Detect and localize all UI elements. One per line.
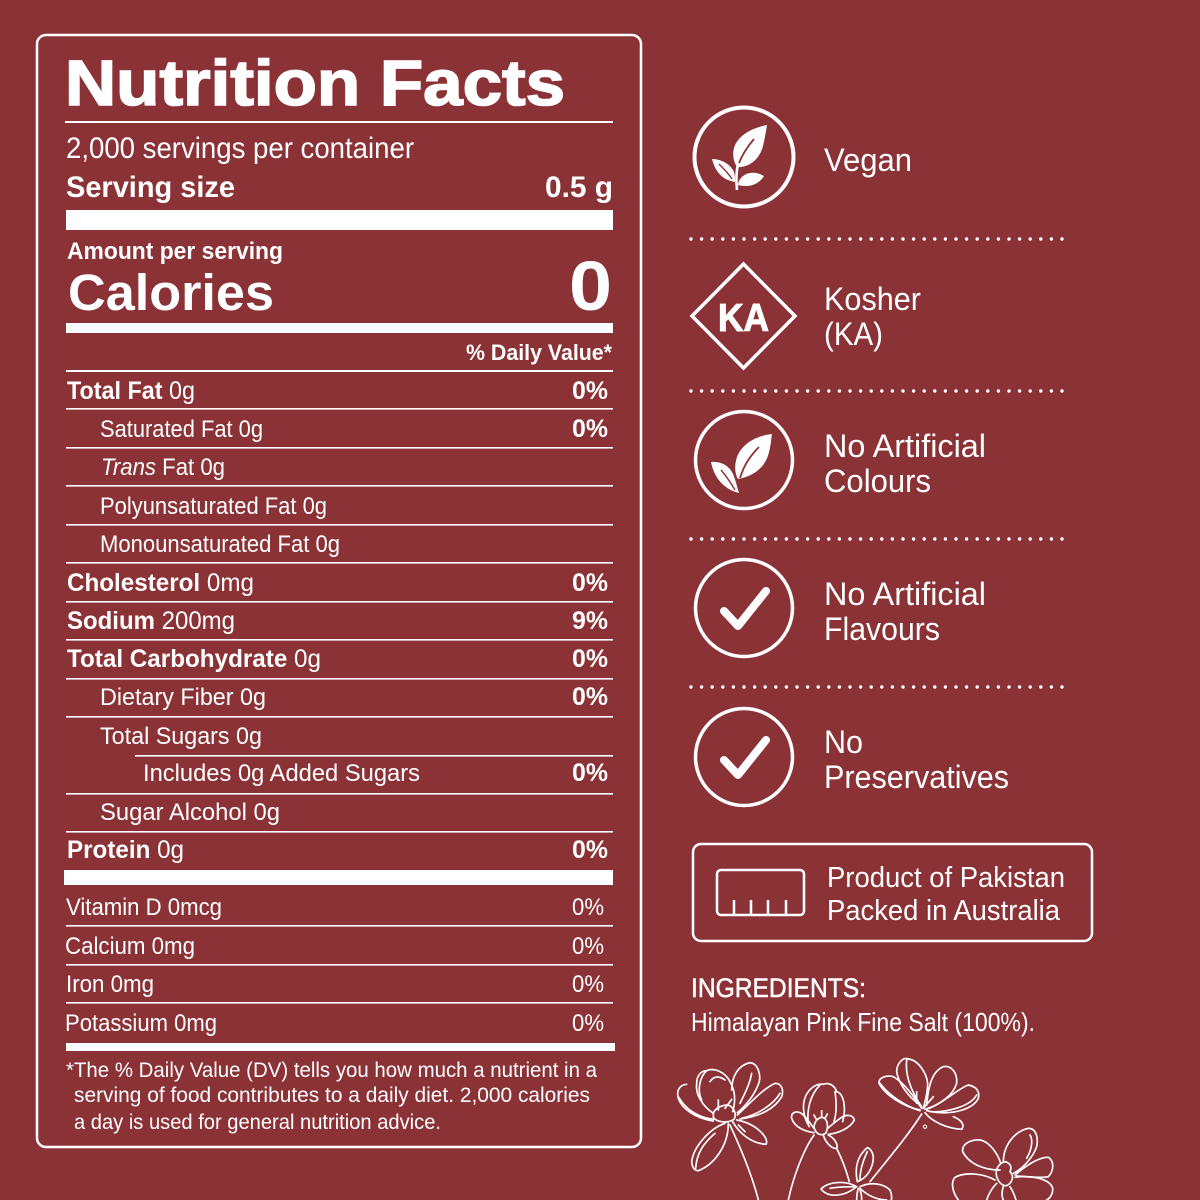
icon: kosher diamond xyxy=(692,264,795,368)
nutrient rows: Cholesterol 0mg xyxy=(67,569,254,597)
calories xyxy=(68,247,612,325)
panel: nutrition facts xyxy=(37,35,641,1147)
nutrient rows: Protein 0g xyxy=(67,836,184,864)
nutrient rows: 0% xyxy=(572,971,604,998)
nutrient rows: 0% xyxy=(572,415,608,443)
title: Nutrition Facts xyxy=(65,47,565,119)
nutrient rows: 0% xyxy=(572,683,608,711)
nutrient rows: 0% xyxy=(572,645,608,673)
serving size: 0.5 g xyxy=(545,171,613,204)
label: vegan: Vegan xyxy=(824,142,912,178)
ingredients xyxy=(691,973,1035,1037)
nutrient rows: Polyunsaturated Fat 0g xyxy=(100,493,327,520)
nutrient rows: Calcium 0mg xyxy=(65,933,195,960)
icon: no artificial colours leaf xyxy=(696,412,792,508)
label: kosher xyxy=(824,281,921,352)
footnote: serving of food contributes to a daily diet. 2,000 calories xyxy=(74,1084,590,1107)
divider: dotted 1 xyxy=(691,237,1063,241)
serving size xyxy=(66,171,613,204)
nutrient rows: 0% xyxy=(572,1010,604,1037)
nutrient rows: 9% xyxy=(572,607,608,635)
calories: 0 xyxy=(569,247,612,325)
nutrient rows: Saturated Fat 0g xyxy=(100,416,263,443)
icon: check no preservatives xyxy=(696,708,792,806)
icon: vegan plant xyxy=(694,108,794,206)
nutrient rows: Total Carbohydrate 0g xyxy=(67,645,321,673)
label: no artificial colours xyxy=(824,428,986,499)
label: no artificial flavours: Flavours xyxy=(824,611,940,647)
label: no preservatives xyxy=(824,724,1009,795)
nutrient rows: 0% xyxy=(572,377,608,405)
servings per container: 2,000 servings per container xyxy=(66,132,414,165)
label: no artificial flavours: No Artificial xyxy=(824,576,986,612)
label: no artificial colours: Colours xyxy=(824,463,931,499)
flower 4 xyxy=(821,1148,892,1200)
nutrient rows: Dietary Fiber 0g xyxy=(100,684,266,711)
label: no artificial colours: No Artificial xyxy=(824,428,986,464)
icon: ruler xyxy=(717,870,804,915)
label: no artificial flavours xyxy=(824,576,986,647)
nutrient rows: Includes 0g Added Sugars xyxy=(143,760,420,787)
panel: origin xyxy=(693,844,1092,941)
flower 5 xyxy=(953,1128,1053,1200)
nutrient rows: Vitamin D 0mcg xyxy=(66,894,222,921)
label: kosher: Kosher xyxy=(824,281,921,317)
nutrient rows: Sugar Alcohol 0g xyxy=(100,799,280,826)
divider: dotted 3 xyxy=(691,537,1063,541)
calories: Calories xyxy=(68,264,274,321)
ingredients: Himalayan Pink Fine Salt (100%). xyxy=(691,1007,1035,1037)
nutrient rows: 0% xyxy=(572,759,608,787)
divider: dotted 2 xyxy=(691,389,1063,393)
nutrient rows: 0% xyxy=(572,894,604,921)
footnote: *The % Daily Value (DV) tells you how much a nutrient in a xyxy=(66,1059,597,1082)
flower 2 xyxy=(788,1084,854,1200)
nutrient rows xyxy=(64,121,615,1051)
nutrient rows: Total Fat 0g xyxy=(67,377,195,405)
illustration: flowers xyxy=(678,1059,1053,1200)
nutrient rows: Total Sugars 0g xyxy=(100,723,262,750)
flower 3 xyxy=(870,1059,979,1182)
nutrient rows: Monounsaturated Fat 0g xyxy=(100,531,340,558)
serving size: Serving size xyxy=(66,171,235,204)
icon: check artificial flavours xyxy=(696,560,792,656)
origin text xyxy=(827,862,1065,927)
nutrient rows: Potassium 0mg xyxy=(65,1010,217,1037)
label: kosher: (KA) xyxy=(824,316,883,352)
amount per serving: Amount per serving xyxy=(67,238,283,265)
origin text: Packed in Australia xyxy=(827,895,1061,927)
label: no preservatives: No xyxy=(824,724,863,760)
nutrient rows: 0% xyxy=(572,569,608,597)
nutrient rows: Iron 0mg xyxy=(66,971,154,998)
nutrient rows: 0% xyxy=(572,836,608,864)
icon: kosher diamond: KA xyxy=(718,297,769,340)
ingredients: INGREDIENTS: xyxy=(691,973,866,1003)
footnote: a day is used for general nutrition advice. xyxy=(74,1111,441,1134)
nutrient rows: Trans Fat 0g xyxy=(101,454,225,481)
nutrient rows: Sodium 200mg xyxy=(67,607,235,635)
label: no preservatives: Preservatives xyxy=(824,759,1009,795)
nutrient rows: 0% xyxy=(572,933,604,960)
daily value heading: % Daily Value* xyxy=(466,340,612,365)
footnote xyxy=(66,1059,597,1134)
origin text: Product of Pakistan xyxy=(827,862,1065,894)
divider: dotted 4 xyxy=(691,685,1063,689)
flower 1 xyxy=(678,1063,783,1200)
